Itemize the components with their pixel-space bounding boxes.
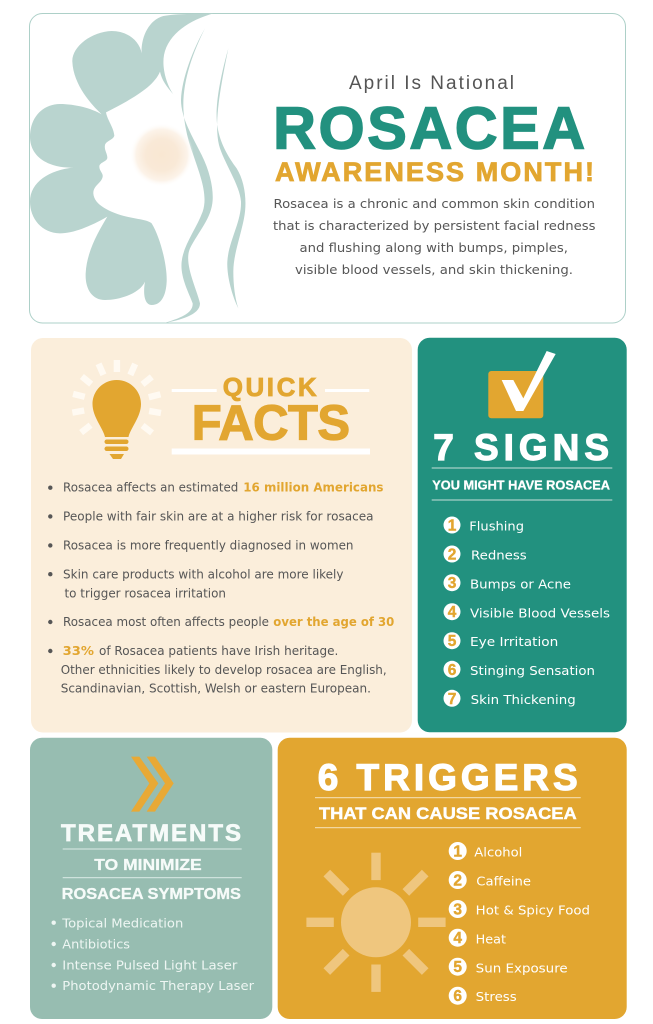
icon: sun — [306, 853, 446, 992]
fact list: of Rosacea patients have Irish heritage. — [99, 643, 338, 658]
numbered list of triggers: 5 — [453, 959, 462, 976]
numbered list of triggers: Stress — [476, 989, 517, 1004]
numbered list of signs: 1 — [448, 518, 457, 534]
numbered list of triggers — [449, 842, 590, 1005]
fact list: 33% — [63, 643, 94, 658]
numbered list of signs: 2 — [448, 546, 456, 564]
fact list: Rosacea is more frequently diagnosed in women — [63, 537, 354, 552]
heading: Awareness Month: AWARENESS MONTH! — [275, 157, 594, 187]
numbered list of triggers: 1 — [453, 844, 462, 860]
treatment list: Antibiotics — [62, 936, 130, 951]
numbered list of signs: Visible Blood Vessels — [470, 605, 610, 620]
subheading: rosacea symptoms: ROSACEA SYMPTOMS — [62, 886, 241, 903]
fact list: Rosacea affects an estimated — [63, 480, 238, 495]
intro paragraph: Rosacea is a chronic and common skin condition — [274, 196, 595, 211]
numbered list of signs: Stinging Sensation — [470, 663, 595, 678]
numbered list of signs: Skin Thickening — [471, 692, 576, 707]
numbered list of triggers: 2 — [453, 872, 462, 890]
heading: Quick Facts: QUICK — [223, 372, 317, 402]
numbered list of signs: 3 — [448, 575, 457, 592]
icon: cheek blush — [130, 123, 194, 187]
heading: 7 Signs: 7 SIGNS — [433, 427, 609, 468]
heading: Quick Facts — [172, 372, 370, 454]
fact list: Scandinavian, Scottish, Welsh or eastern European. — [61, 681, 371, 696]
fact list: to trigger rosacea irritation — [64, 586, 226, 601]
numbered list of signs: 7 — [448, 691, 456, 708]
numbered list of triggers: 3 — [453, 902, 462, 918]
subtitle: April Is National: April Is National — [349, 73, 514, 94]
treatment list — [52, 916, 255, 993]
numbered list of triggers: 6 — [453, 988, 462, 1005]
treatment list: Topical Medication — [61, 916, 183, 931]
numbered list of signs: Eye Irritation — [470, 634, 558, 649]
fact list — [48, 480, 395, 696]
treatment list: Intense Pulsed Light Laser — [62, 957, 238, 972]
panel: header — [30, 13, 626, 323]
intro paragraph — [273, 196, 596, 277]
fact list: over the age of 30 — [273, 614, 395, 629]
heading: Quick Facts: FACTS — [192, 396, 350, 450]
numbered list of signs — [444, 516, 610, 708]
icon: double chevron arrow — [131, 757, 174, 812]
numbered list of signs: Bumps or Acne — [470, 576, 571, 591]
icon: light bulb — [72, 360, 162, 459]
numbered list of signs: Redness — [471, 547, 527, 562]
intro paragraph: that is characterized by persistent facial redness — [273, 218, 596, 233]
numbered list of triggers: Alcohol — [474, 845, 522, 860]
treatment list: Photodynamic Therapy Laser — [62, 978, 255, 993]
heading: 6 triggers: 6 TRIGGERS — [318, 757, 578, 798]
icon: check box — [488, 351, 556, 418]
numbered list of signs: Flushing — [469, 519, 524, 534]
numbered list of triggers: Heat — [476, 931, 506, 946]
fact list: People with fair skin are at a higher risk for rosacea — [63, 508, 374, 523]
numbered list of signs: 4 — [448, 604, 457, 621]
numbered list of triggers: Caffeine — [476, 874, 531, 889]
fact list: Rosacea most often affects people — [63, 614, 269, 629]
heading: treatments: TREATMENTS — [61, 820, 241, 847]
panel: 7 signs — [418, 338, 627, 732]
intro paragraph: and flushing along with bumps, pimples, — [300, 240, 568, 255]
numbered list of signs: 6 — [448, 662, 457, 679]
intro paragraph: visible blood vessels, and skin thickening. — [295, 262, 573, 277]
subheading: to minimize: TO MINIMIZE — [94, 857, 202, 874]
fact list: 16 million Americans — [243, 480, 384, 495]
panel: 6 triggers — [278, 738, 627, 1019]
panel: quick facts — [31, 338, 412, 732]
illustration: woman's profile with flower hair — [30, 13, 245, 323]
numbered list of triggers: Sun Exposure — [476, 960, 568, 975]
numbered list of triggers: 4 — [453, 930, 462, 947]
fact list: Other ethnicities likely to develop rosacea are English, — [61, 662, 387, 677]
title: Rosacea: ROSACEA — [273, 95, 585, 161]
subheading: that can cause rosacea: THAT CAN CAUSE ROSACEA — [319, 804, 577, 823]
numbered list of signs: 5 — [448, 633, 457, 650]
panel: treatments — [30, 738, 272, 1019]
subheading: you might have rosacea: YOU MIGHT HAVE ROSACEA — [432, 477, 611, 492]
fact list: Skin care products with alcohol are more likely — [63, 566, 344, 581]
numbered list of triggers: Hot & Spicy Food — [476, 902, 590, 917]
